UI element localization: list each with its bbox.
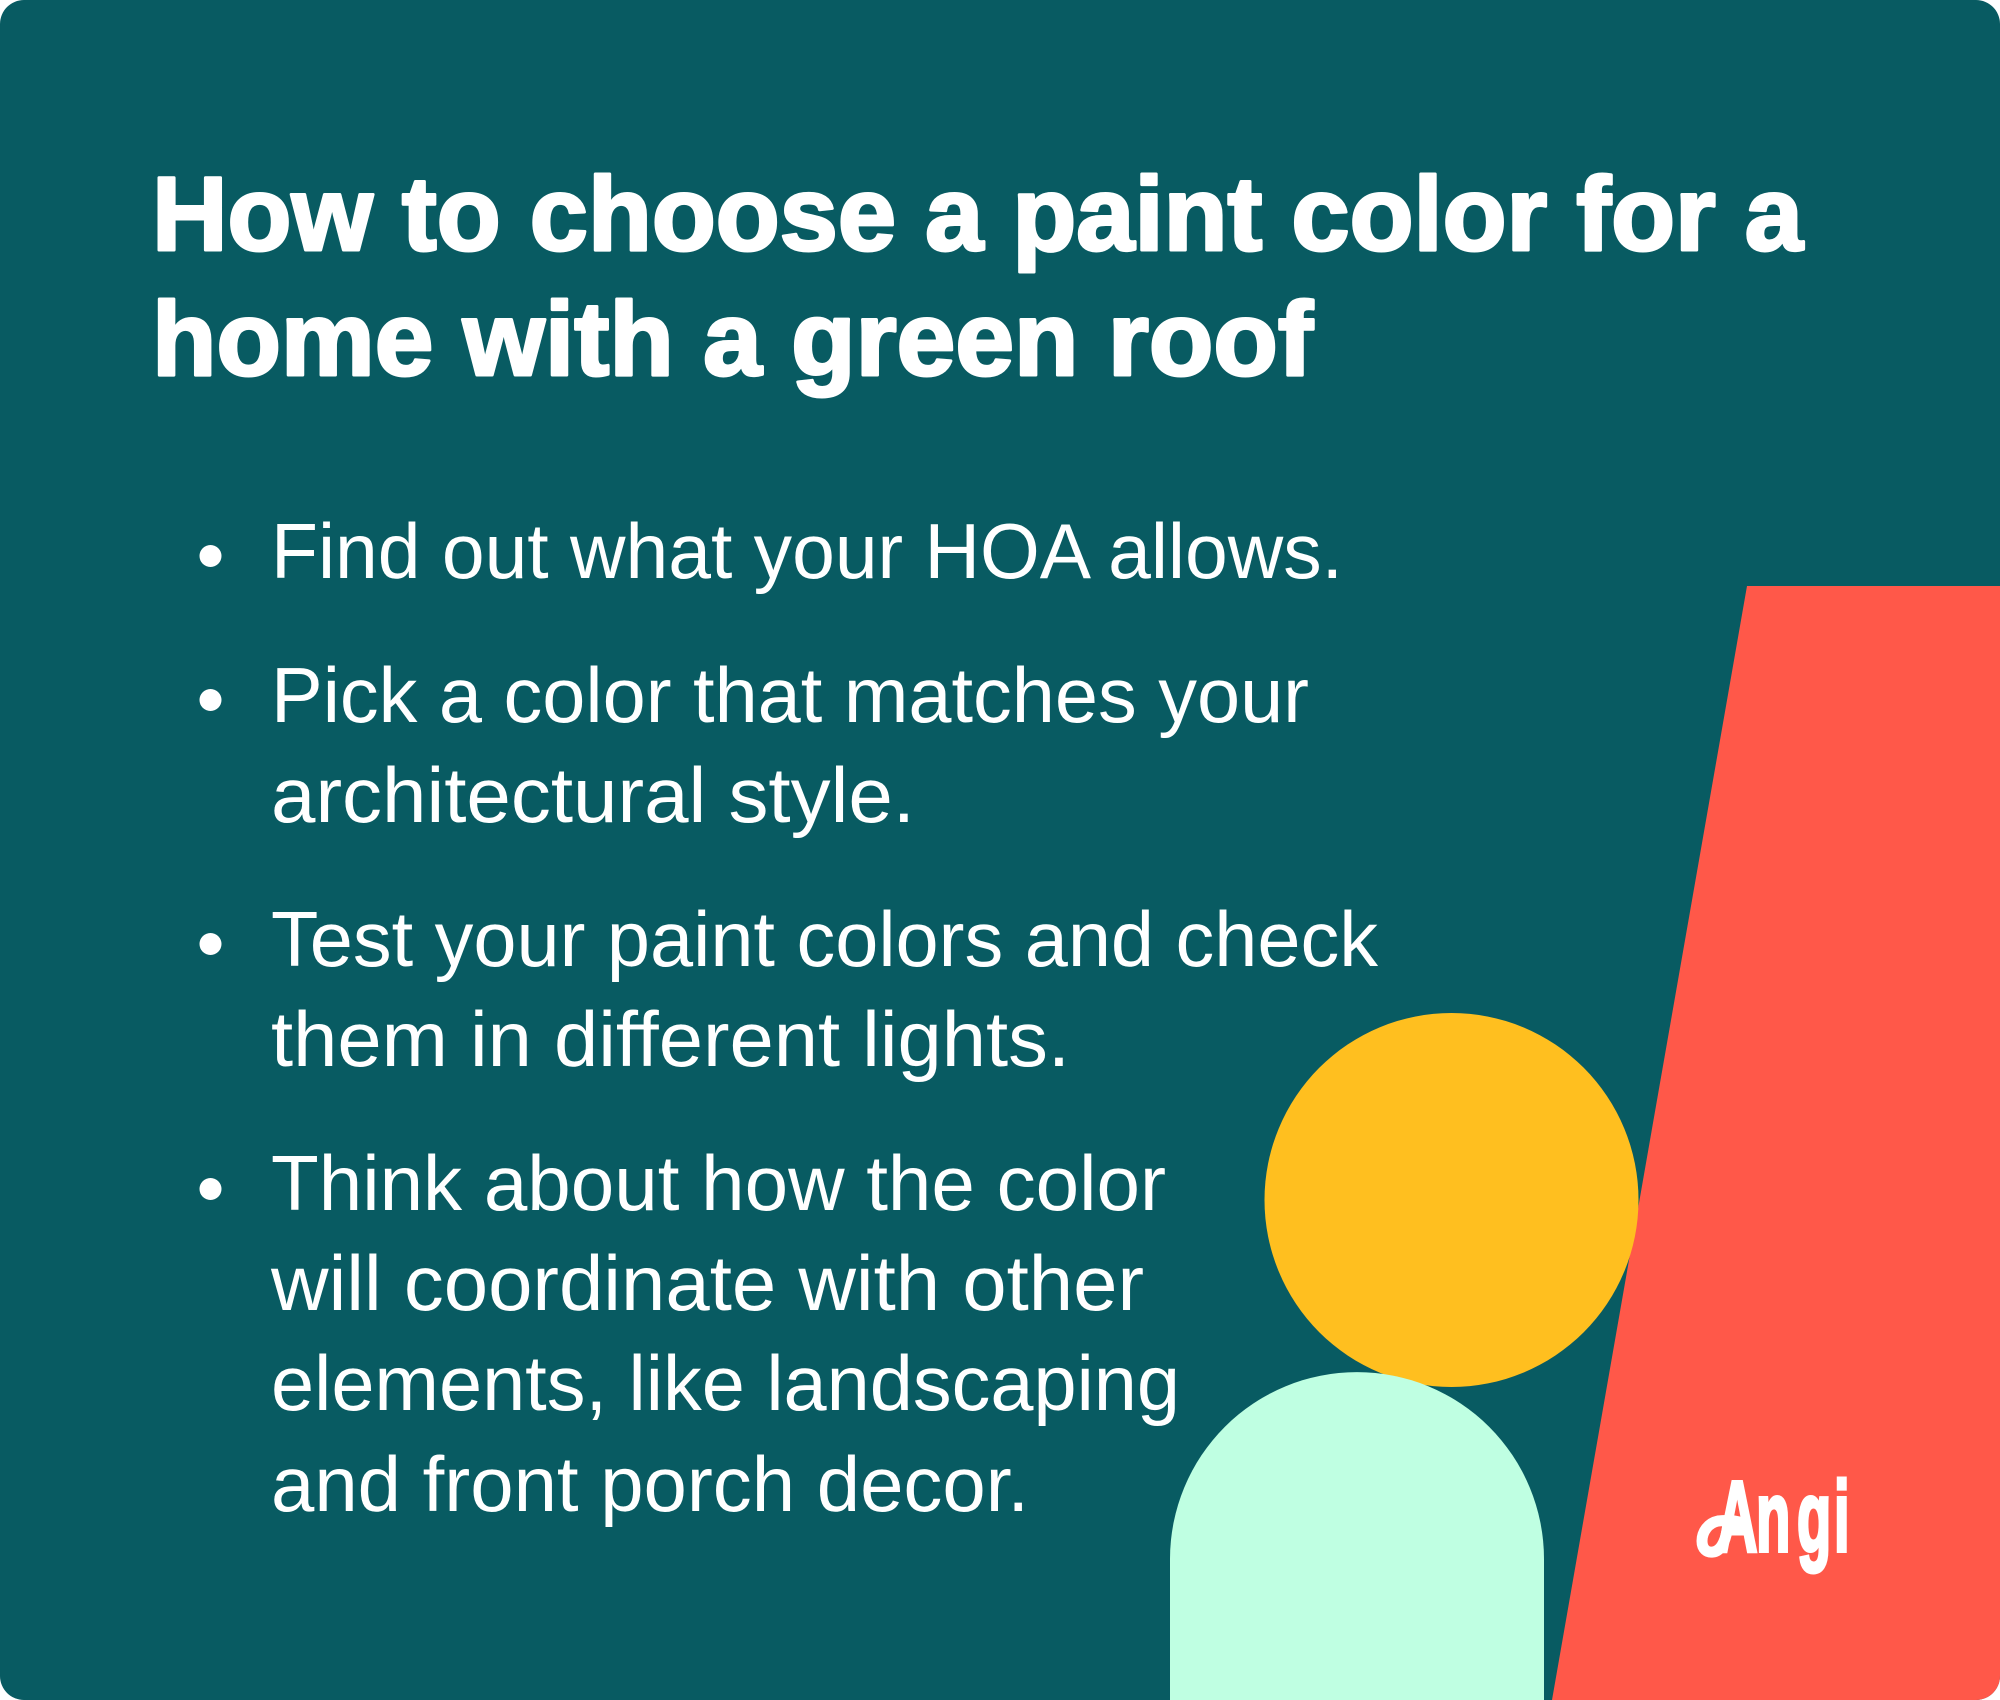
- bullet: HOA: Find out what your HOA allows.: [271, 507, 1343, 595]
- bullet: coordinate with elements: elements, like landscaping: [271, 1339, 1180, 1427]
- bullet: coordinate with elements: [200, 1139, 1180, 1528]
- yellow circle: [1264, 1013, 1638, 1387]
- title: [152, 156, 1805, 398]
- Angi logo: Angi: [1717, 1462, 1850, 1573]
- bullet: coordinate with elements: and front porch decor.: [271, 1440, 1029, 1528]
- bullet: test paint colors: them in different lights.: [271, 995, 1070, 1083]
- mint arch shape: [1170, 1372, 1544, 1700]
- bullet: architectural style: [200, 651, 1309, 839]
- title: home with a green roof: [152, 281, 1314, 398]
- bullet: coordinate with elements: Think about how the color: [271, 1139, 1166, 1227]
- red slanted shape: [1552, 586, 2000, 1700]
- bullet: architectural style: Pick a color that matches your: [271, 651, 1309, 739]
- bullet list: [200, 507, 1379, 1528]
- bullet: architectural style: architectural style.: [271, 751, 915, 839]
- bullet: test paint colors: Test your paint colors and check: [271, 895, 1379, 983]
- bullet: coordinate with elements: will coordinate with other: [270, 1239, 1144, 1327]
- bullet: test paint colors: [200, 895, 1379, 1083]
- title: How to choose a paint color for a: [152, 156, 1805, 273]
